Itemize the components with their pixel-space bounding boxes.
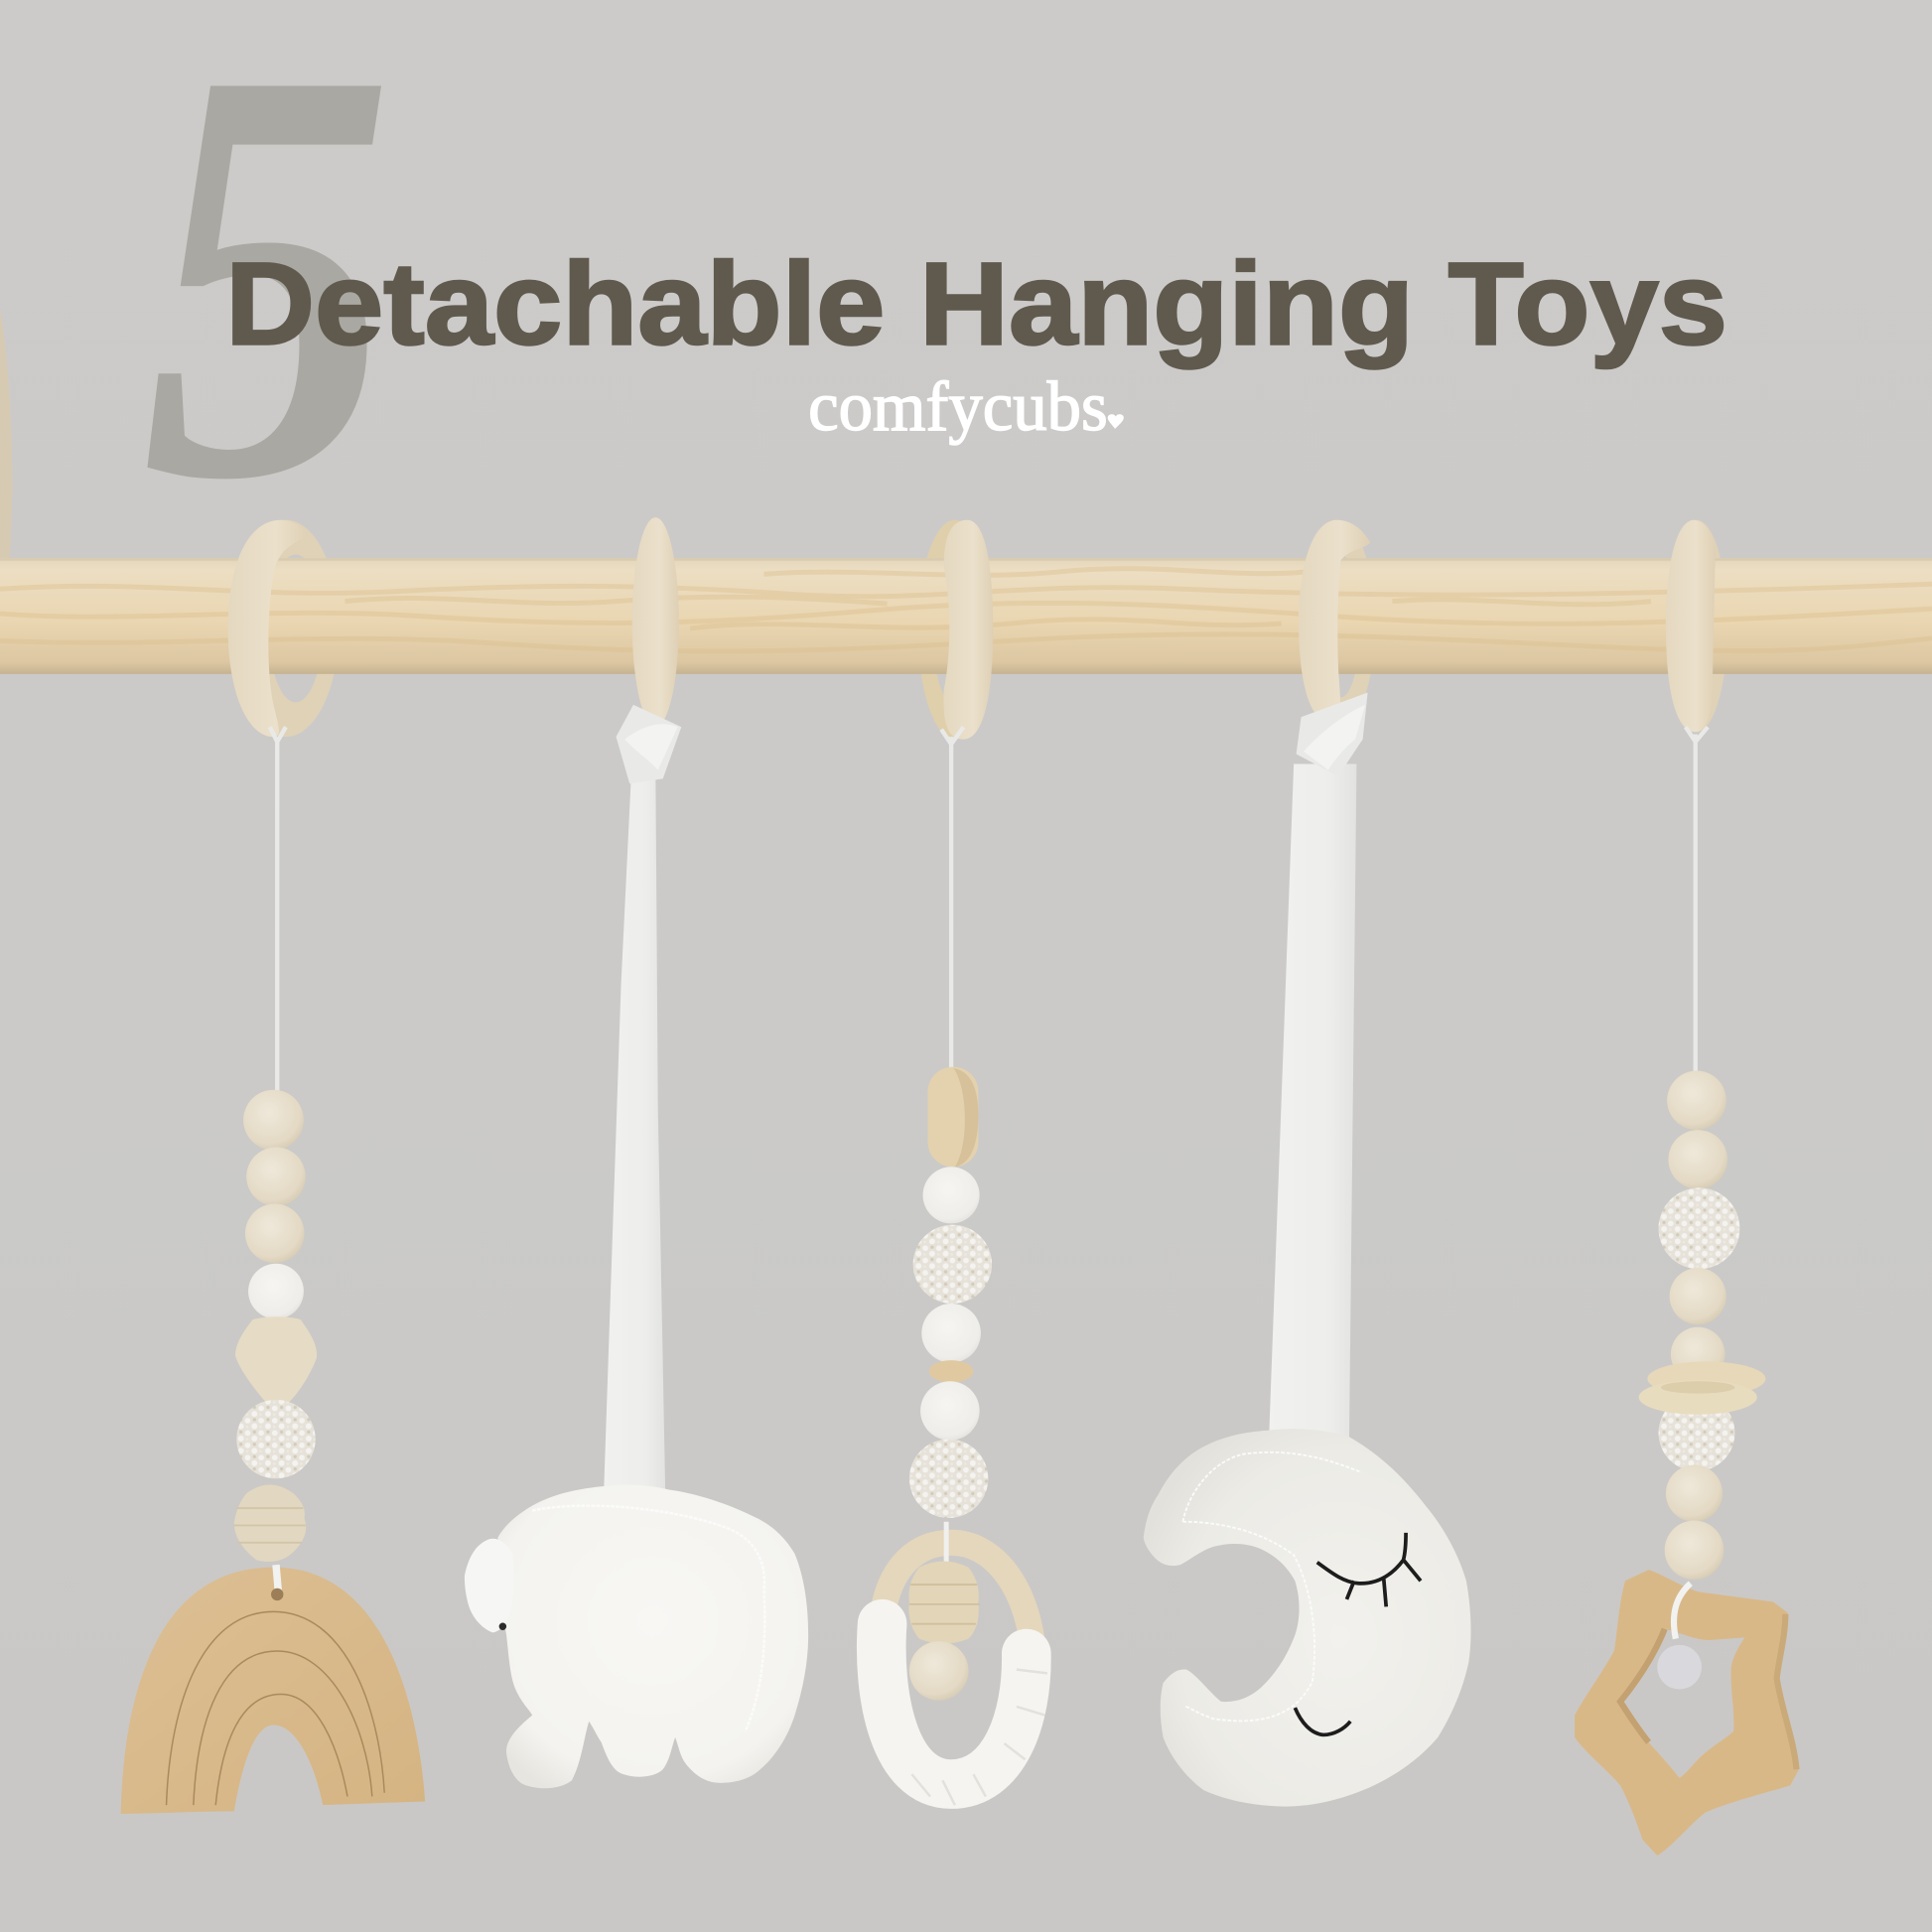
wood ring <box>883 1543 1033 1645</box>
cord <box>1686 727 1708 1074</box>
wooden rod <box>0 558 1932 674</box>
ring 1 front <box>228 520 308 737</box>
toy 4: moon <box>1144 692 1471 1807</box>
star <box>1575 1570 1799 1856</box>
ring 4 front <box>1299 520 1370 721</box>
beads <box>909 1067 992 1518</box>
beads <box>1639 1070 1765 1580</box>
ring 2 front <box>632 517 679 727</box>
toy 5: star teether <box>1575 727 1799 1856</box>
bell <box>1657 1645 1702 1690</box>
eye <box>499 1622 506 1630</box>
toy 2: elephant <box>465 705 808 1788</box>
title: Detachable Hanging Toys <box>225 237 1727 368</box>
macrame wrap <box>882 1624 1027 1784</box>
ear <box>465 1539 514 1632</box>
moon body <box>1144 1429 1471 1807</box>
ring 5 front <box>1666 520 1716 732</box>
ribbon <box>604 705 681 1493</box>
beads <box>234 1090 317 1562</box>
toy 1: rainbow teether <box>121 727 425 1814</box>
ribbon <box>1269 692 1368 1440</box>
cord <box>270 727 286 1094</box>
toy 3: beads and macrame ring <box>882 727 1047 1805</box>
cord <box>941 727 964 1069</box>
brand logo: comfycubs <box>808 368 1108 446</box>
sleeping eye <box>1317 1533 1421 1606</box>
inner beads <box>908 1561 979 1644</box>
rings behind the rod <box>233 520 1727 740</box>
rainbow <box>121 1568 425 1814</box>
body <box>497 1484 808 1788</box>
smile <box>1295 1708 1350 1734</box>
wooden post at left edge <box>0 308 12 561</box>
ring 3 front <box>943 520 993 740</box>
